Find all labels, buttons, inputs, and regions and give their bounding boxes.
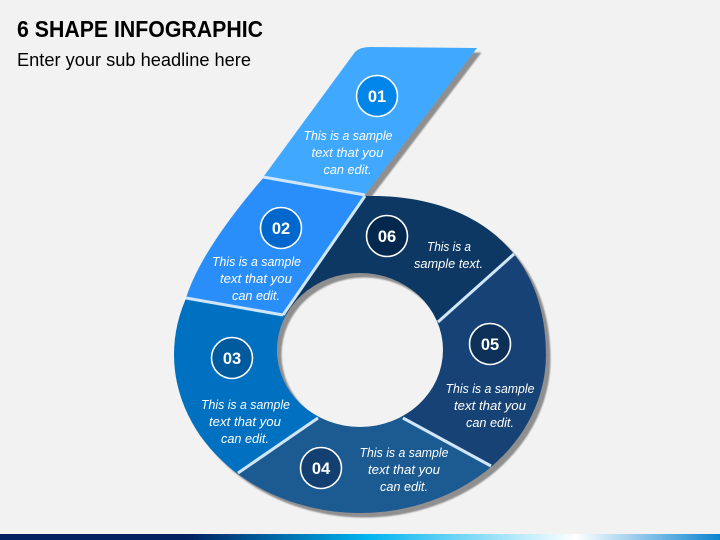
text 06: This is a [427, 240, 471, 254]
text 02: This is a sample [212, 255, 301, 269]
text 04: This is a sample [360, 446, 449, 460]
segment 06 shape [285, 196, 518, 322]
badge 03: 03 [223, 350, 241, 368]
number six shape segments [170, 47, 560, 525]
text 05: can edit. [466, 416, 514, 430]
text 01: text that you [312, 146, 384, 160]
segment 05 shape [400, 253, 552, 472]
text 03: can edit. [221, 432, 269, 446]
segment 01 shape [264, 47, 477, 195]
text 02: can edit. [232, 289, 280, 303]
segment 02 shape [186, 177, 365, 315]
segment 04 shape [237, 417, 496, 518]
text 02 [212, 255, 301, 303]
text 01: This is a sample [304, 129, 393, 143]
badge 06: 06 [378, 228, 396, 246]
item 01 [304, 76, 398, 177]
item 06 [366, 216, 483, 271]
subtitle: Enter your sub headline here [17, 50, 251, 70]
badge 01: 01 [368, 88, 386, 106]
text 02: text that you [220, 272, 292, 286]
badge 02: 02 [272, 220, 290, 238]
text 04: text that you [368, 463, 440, 477]
text 05 [446, 382, 535, 430]
text 05: This is a sample [446, 382, 535, 396]
text 01: can edit. [324, 163, 372, 177]
text 03 [201, 398, 290, 446]
text 04 [360, 446, 449, 494]
text 03: text that you [209, 415, 281, 429]
item 02 [212, 208, 302, 303]
segment separators [186, 177, 514, 473]
segment 03 shape [174, 298, 320, 478]
text 01 [304, 129, 393, 177]
badge 05: 05 [481, 336, 499, 354]
item 04 [300, 446, 449, 494]
text 05: text that you [454, 399, 526, 413]
item 05 [446, 324, 535, 430]
text 06: sample text. [414, 257, 483, 271]
text 04: can edit. [380, 480, 428, 494]
text 06 [414, 240, 483, 271]
text 03: This is a sample [201, 398, 290, 412]
badge 04 [300, 448, 342, 488]
title: 6 SHAPE INFOGRAPHIC [17, 16, 263, 42]
badge 04: 04 [312, 460, 331, 478]
item 03 [201, 338, 290, 446]
footer gradient bar [0, 534, 720, 540]
